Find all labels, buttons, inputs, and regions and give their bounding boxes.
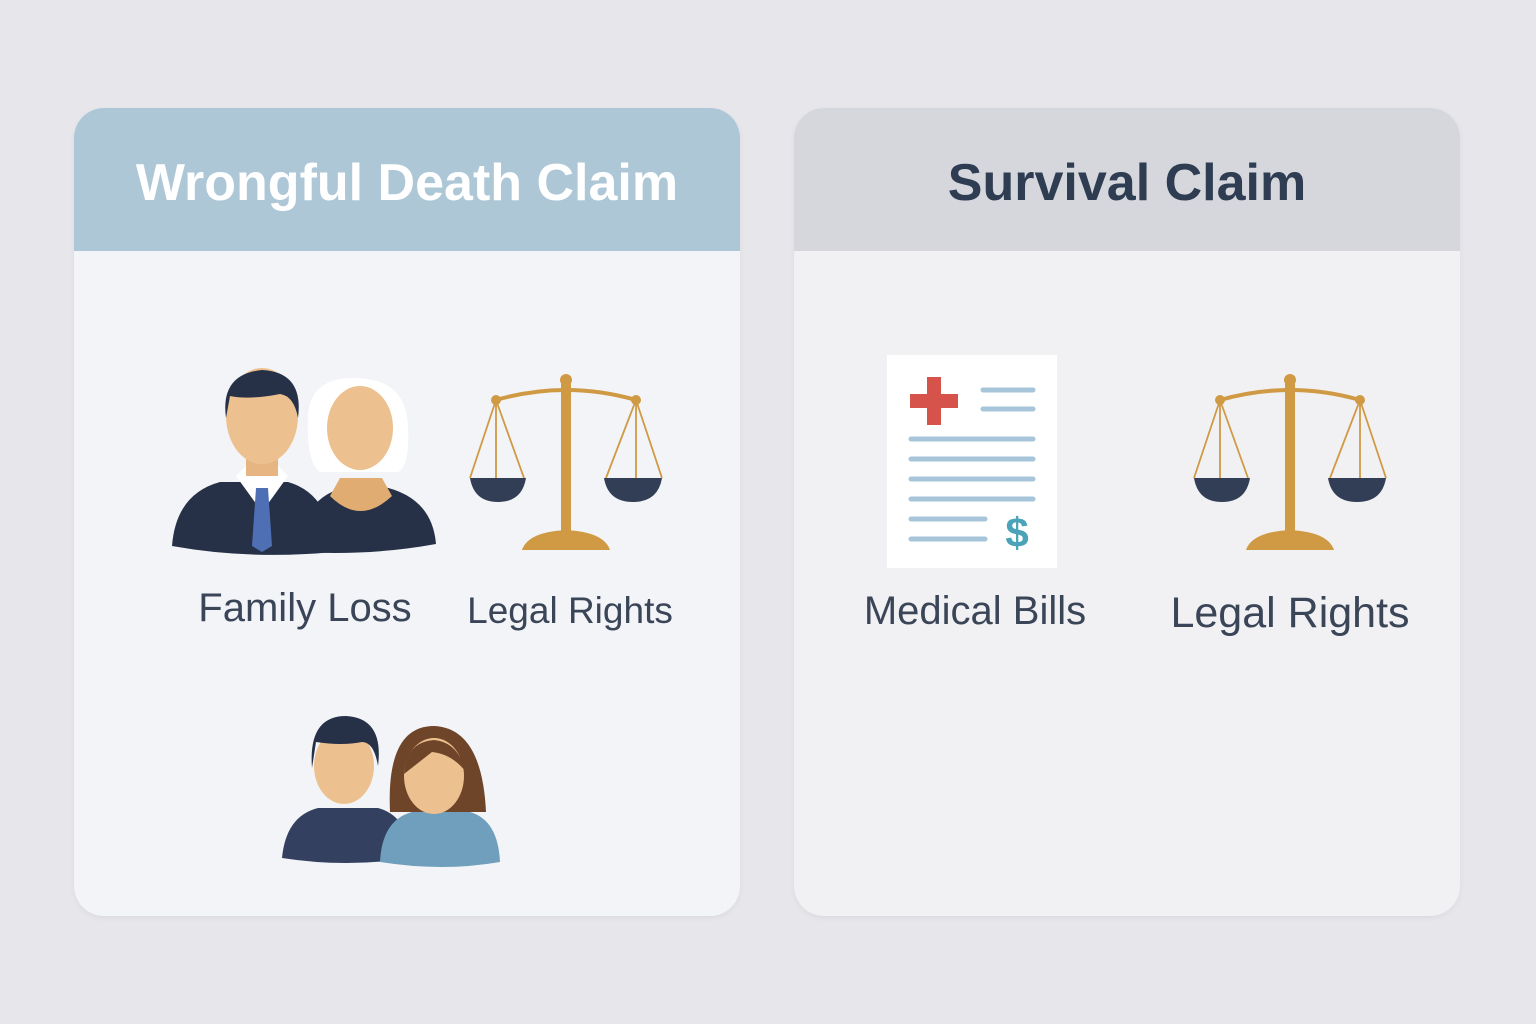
icon: medical bill document [887, 355, 1057, 568]
icon: couple [282, 716, 500, 867]
icon: scales of justice [469, 374, 663, 550]
icon: family (man and older woman) [172, 368, 436, 555]
icon: medical bill document: $ [1005, 509, 1029, 556]
heading: Survival Claim: Survival Claim [948, 154, 1306, 212]
label: Family Loss: Family Loss [198, 586, 412, 630]
heading: Wrongful Death Claim: Wrongful Death Claim [136, 154, 678, 212]
icon: scales of justice [1193, 374, 1387, 550]
panel: wrongful death claim [74, 108, 740, 916]
label: Legal Rights: Legal Rights [467, 590, 673, 631]
label: Medical Bills: Medical Bills [864, 589, 1086, 633]
panel: survival claim [794, 108, 1460, 916]
label: Legal Rights: Legal Rights [1170, 589, 1410, 637]
